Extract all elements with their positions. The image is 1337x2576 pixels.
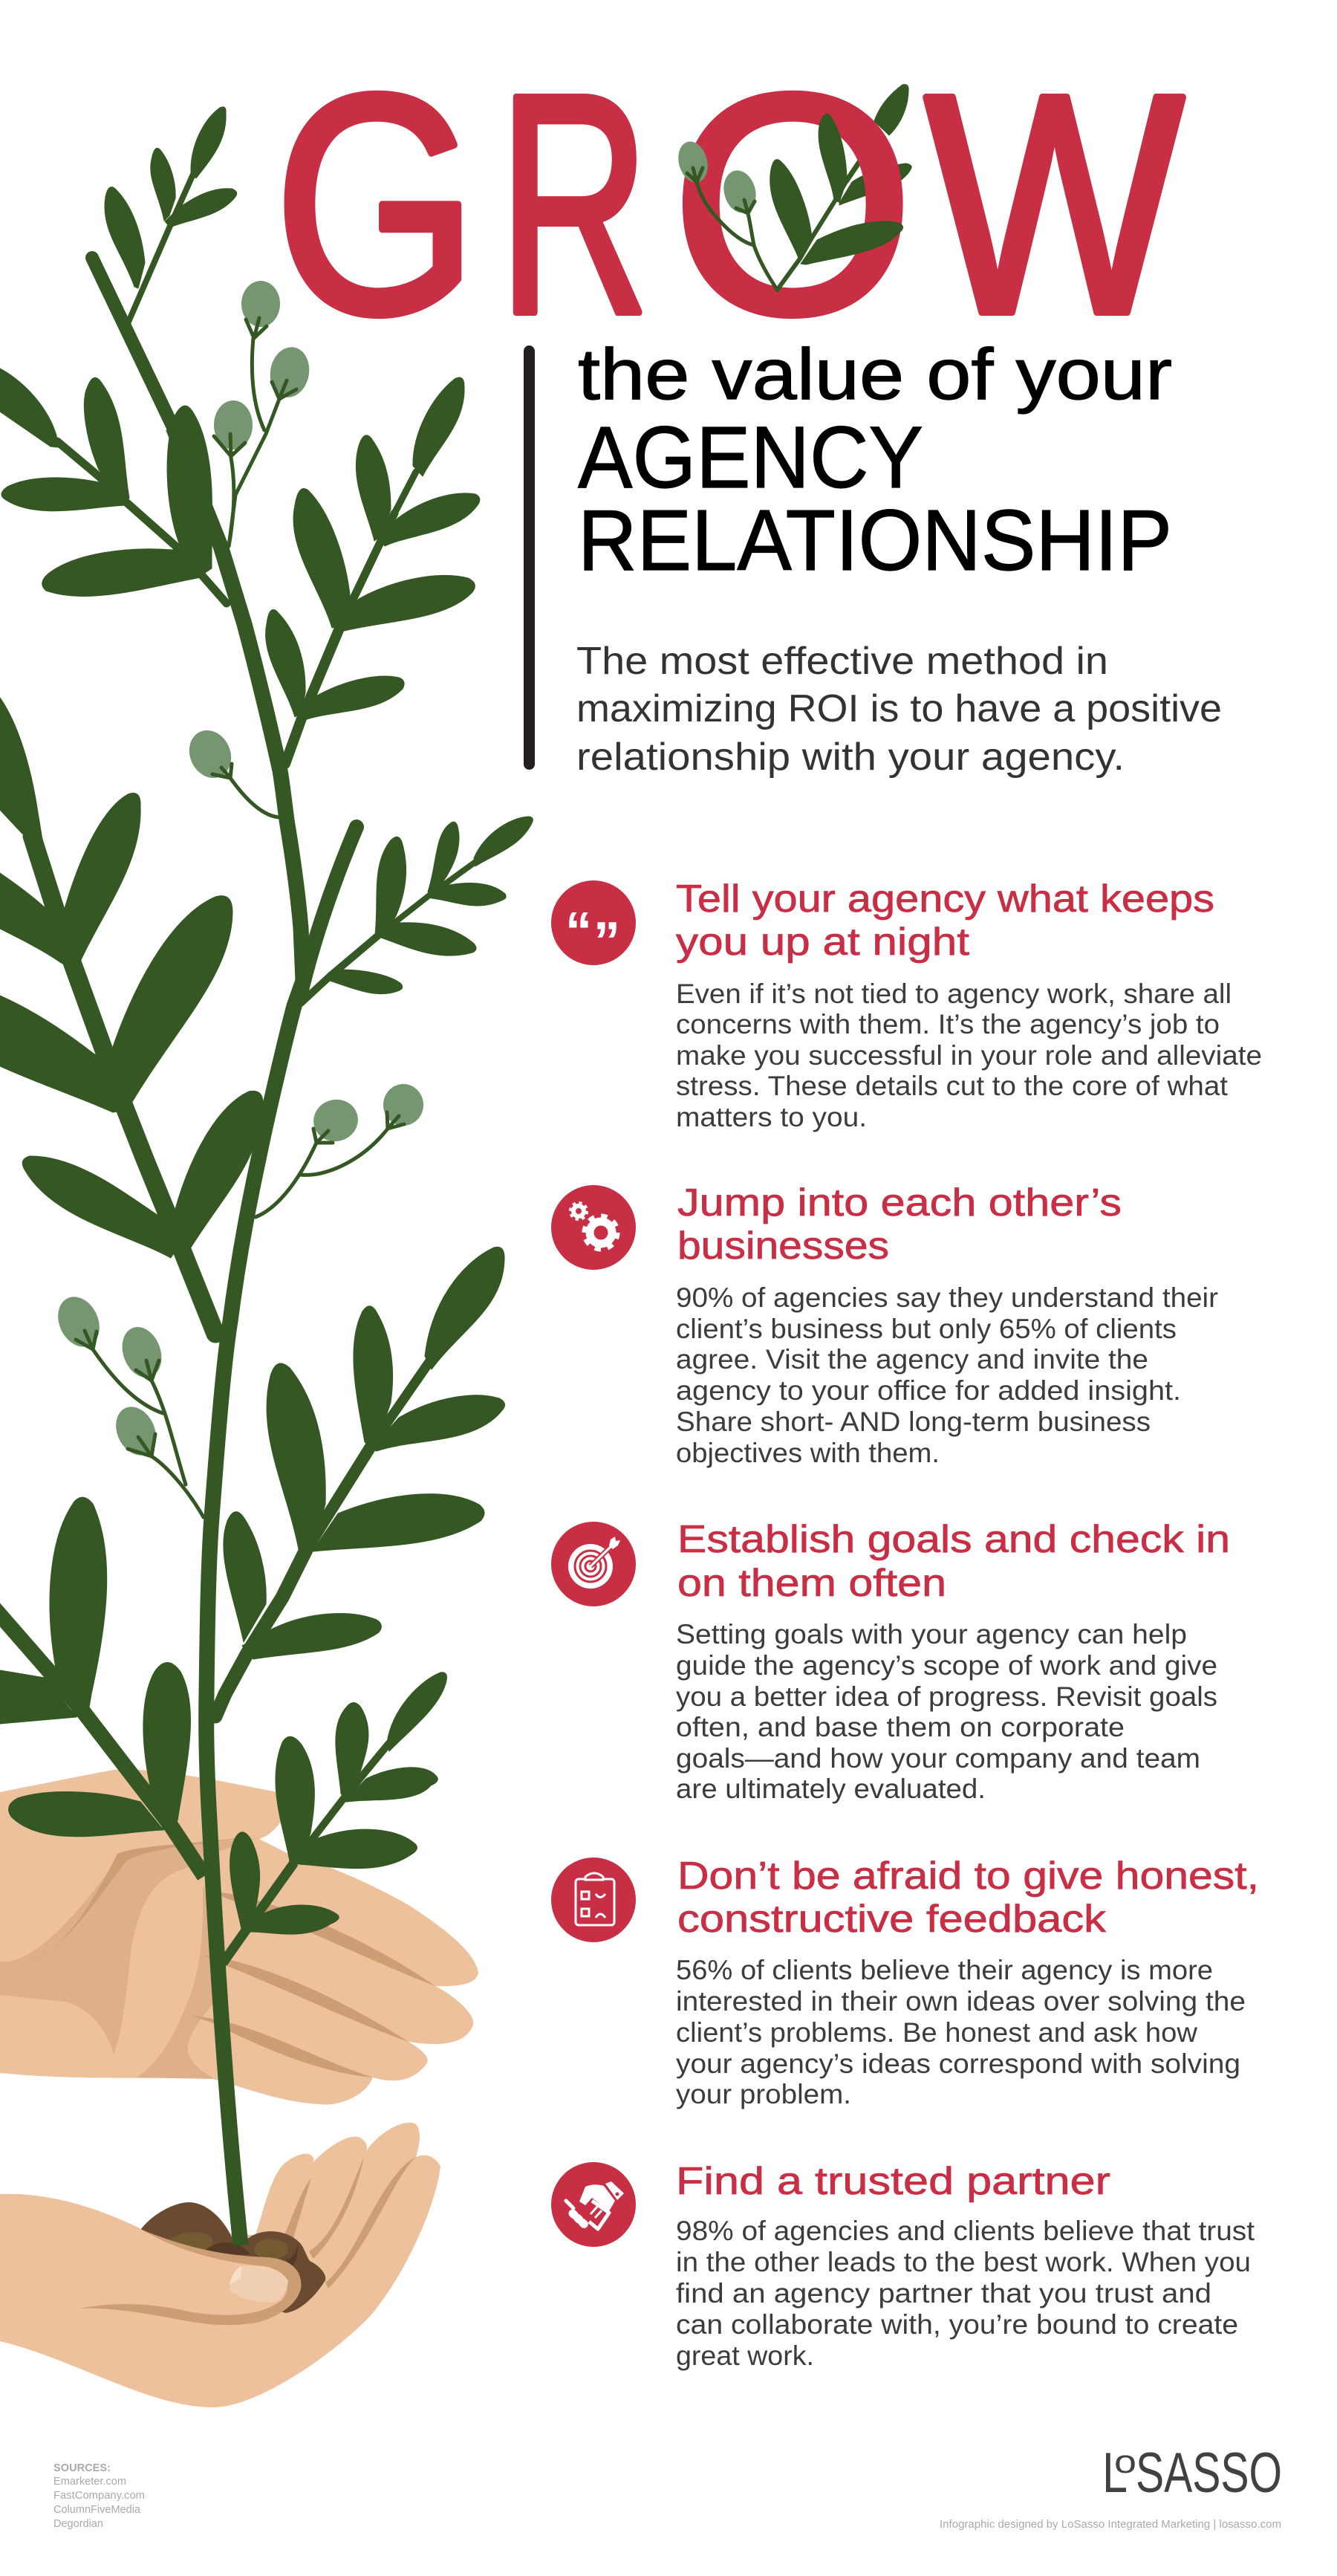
body tip 5: in the other leads to the best work. When you	[676, 2247, 1251, 2277]
heading tip 2	[677, 1181, 1122, 1268]
icon: feedback clipboard	[551, 1858, 636, 1942]
logo: LoSasso	[1102, 2442, 1282, 2505]
illustration: thumb holding soil	[80, 2230, 301, 2325]
small plant in front of the letter O	[674, 114, 903, 291]
sources: FastCompany.com	[53, 2489, 145, 2502]
illustration: lower hand and soil	[0, 2123, 440, 2407]
body tip 4: 56% of clients believe their agency is more	[676, 1955, 1213, 1985]
heading tip 1	[676, 877, 1214, 964]
sources: Degordian	[53, 2517, 103, 2530]
lowest right twig with leaves	[223, 1673, 446, 1963]
heading tip 2: businesses	[677, 1224, 889, 1268]
body tip 2: objectives with them.	[676, 1438, 940, 1468]
body tip 5: find an agency partner that you trust and	[676, 2278, 1211, 2309]
body tip 1	[676, 979, 1262, 1132]
icon: handshake	[551, 2162, 636, 2247]
sources: ColumnFiveMedia	[53, 2503, 141, 2516]
body tip 2: agree. Visit the agency and invite the	[676, 1344, 1148, 1375]
heading tip 4: Don’t be afraid to give honest,	[677, 1855, 1259, 1898]
body tip 5: can collaborate with, you’re bound to create	[676, 2309, 1238, 2340]
illustration: upper hand	[0, 1769, 478, 2105]
panel: tip 4	[551, 1855, 1259, 2109]
panel: tip 5	[551, 2160, 1255, 2371]
icon: quotation marks: “	[565, 902, 592, 961]
lower right branch with leaves	[215, 1247, 505, 1716]
body tip 4: your problem.	[676, 2079, 851, 2109]
body tip 2: client’s business but only 65% of clients	[676, 1314, 1177, 1344]
heading tip 4	[677, 1855, 1259, 1941]
logo: LoSasso: o	[1114, 2444, 1136, 2480]
panel: tip 1	[551, 877, 1262, 1132]
body tip 3: guide the agency’s scope of work and give	[676, 1650, 1217, 1681]
title: GROW: R	[498, 29, 649, 378]
buds: left cluster	[51, 1290, 204, 1517]
title: GROW: W	[925, 30, 1186, 378]
small plant behind the letter O	[839, 85, 911, 205]
body tip 5: great work.	[676, 2340, 814, 2371]
body tip 1: stress. These details cut to the core of what	[676, 1071, 1229, 1101]
body tip 2: 90% of agencies say they understand their	[676, 1282, 1218, 1313]
logo: LoSasso: L	[1102, 2442, 1128, 2505]
body tip 3: goals—and how your company and team	[676, 1743, 1200, 1774]
body tip 2: agency to your office for added insight.	[676, 1375, 1181, 1406]
upper right twig with leaves	[266, 377, 480, 764]
heading tip 3	[677, 1518, 1230, 1605]
body tip 3: often, and base them on corporate	[676, 1712, 1125, 1742]
credit line: Infographic designed by LoSasso Integrated Marketing | losasso.com	[940, 2518, 1281, 2531]
body tip 3	[676, 1619, 1217, 1804]
big left branch with leaves	[0, 698, 263, 1334]
body tip 4: your agency’s ideas correspond with solving	[676, 2048, 1240, 2079]
body tip 1: make you successful in your role and alleviate	[676, 1040, 1262, 1071]
buds: right cluster	[256, 1084, 423, 1217]
body tip 5: 98% of agencies and clients believe that trust	[676, 2216, 1255, 2246]
sources: Emarketer.com	[53, 2475, 126, 2488]
bud: lower stalk	[182, 724, 279, 817]
title: GROW: O	[671, 30, 914, 379]
main stem	[92, 258, 357, 2245]
sources: SOURCES:	[53, 2462, 111, 2474]
heading: the value of your agency relationship: the value of your	[578, 334, 1172, 415]
illustration: main plant	[0, 107, 533, 2245]
body tip 2: Share short- AND long-term business	[676, 1407, 1151, 1437]
body tip 4	[676, 1955, 1246, 2109]
heading tip 1: Tell your agency what keeps	[676, 877, 1214, 921]
middle right twig with leaves	[301, 817, 533, 1003]
heading: the value of your agency relationship: AGENCY	[578, 409, 923, 507]
intro paragraph	[576, 640, 1222, 779]
title: GROW	[274, 29, 1186, 379]
body tip 1: concerns with them. It’s the agency’s job to	[676, 1009, 1220, 1039]
top twig with leaves	[105, 107, 237, 327]
body tip 2	[676, 1282, 1218, 1468]
buds: top cluster	[214, 281, 313, 546]
panel: tip 3	[551, 1518, 1230, 1804]
icon: target and arrow	[551, 1522, 636, 1606]
sources	[53, 2462, 145, 2530]
heading tip 3: on them often	[677, 1562, 946, 1605]
body tip 3: are ultimately evaluated.	[676, 1774, 986, 1804]
body tip 1: Even if it’s not tied to agency work, share all	[676, 979, 1232, 1009]
lower left branch with leaves	[0, 1497, 204, 1876]
body tip 4: client’s problems. Be honest and ask how	[676, 2017, 1197, 2048]
body tip 3: you a better idea of progress. Revisit goals	[676, 1681, 1217, 1712]
intro paragraph: relationship with your agency.	[576, 736, 1125, 779]
heading tip 5: Find a trusted partner	[676, 2160, 1110, 2203]
upper left branch with leaves	[0, 369, 227, 603]
icon: quotation marks: ”	[593, 912, 620, 971]
heading tip 3: Establish goals and check in	[677, 1518, 1230, 1561]
intro paragraph: The most effective method in	[576, 640, 1108, 683]
intro paragraph: maximizing ROI is to have a positive	[576, 687, 1222, 730]
logo: LoSasso: SASSO	[1136, 2442, 1282, 2505]
heading tip 2: Jump into each other’s	[677, 1181, 1122, 1224]
heading tip 1: you up at night	[676, 921, 970, 964]
title: GROW: G	[274, 30, 478, 379]
divider bar	[524, 345, 535, 770]
body tip 4: interested in their own ideas over solving the	[676, 1986, 1246, 2017]
heading: the value of your agency relationship	[578, 334, 1172, 588]
body tip 5	[676, 2216, 1255, 2371]
icon: gears	[551, 1185, 636, 1270]
icon: quotation marks	[551, 880, 636, 971]
body tip 3: Setting goals with your agency can help	[676, 1619, 1187, 1649]
heading: the value of your agency relationship: RELATIONSHIP	[578, 492, 1172, 588]
heading tip 4: constructive feedback	[677, 1898, 1107, 1941]
panel: tip 2	[551, 1181, 1218, 1468]
body tip 1: matters to you.	[676, 1102, 867, 1132]
